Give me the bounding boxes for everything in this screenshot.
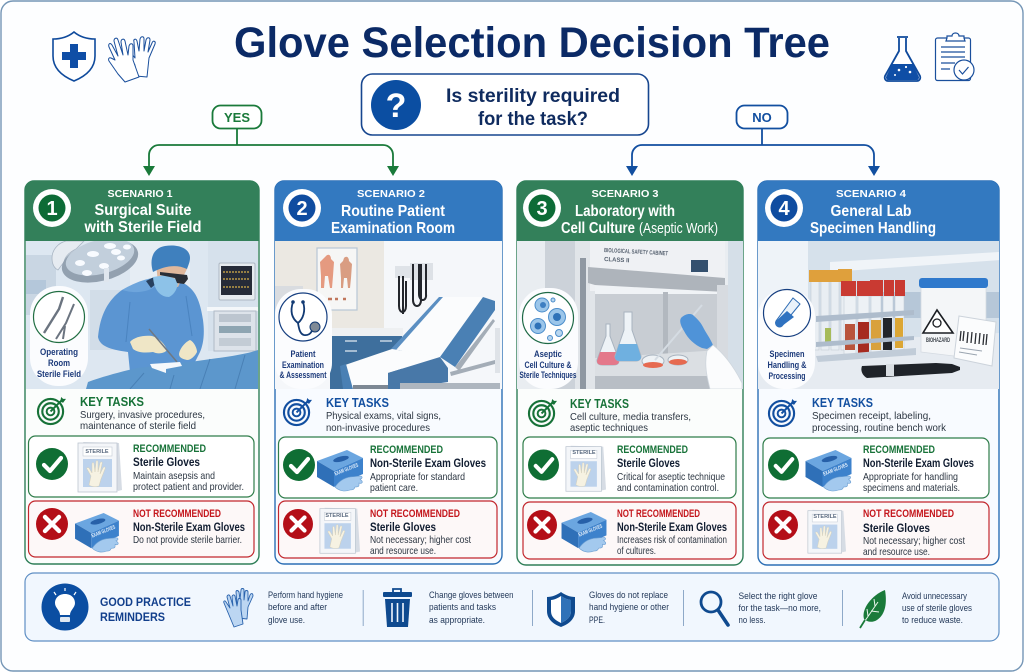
recommended: scenario 4 <box>763 438 989 498</box>
badge: patient examination: Examination <box>282 360 324 371</box>
header: scenario 4: Specimen Handling <box>810 220 936 237</box>
reminder: reduce waste: to reduce waste. <box>902 615 963 626</box>
not recommended: scenario 3: of cultures. <box>617 545 656 557</box>
recommended: scenario 3: Critical for aseptic technique <box>617 471 725 483</box>
not recommended: scenario 1: Do not provide sterile barrier. <box>133 534 242 546</box>
key tasks: scenario 3: Cell culture, media transfers, <box>570 411 691 423</box>
badge: operating room sterile field: Sterile Field <box>37 369 81 380</box>
reminder: not a replacement <box>589 590 669 626</box>
panel: scenario 4 <box>758 181 1000 565</box>
not recommended: scenario 2: STERILE <box>325 513 349 519</box>
not recommended: scenario 4: Sterile Gloves <box>863 521 930 535</box>
reminder: change gloves: Change gloves between <box>429 590 514 601</box>
badge: specimen handling: Specimen <box>770 349 805 360</box>
recommended: scenario 3: Sterile Gloves <box>617 456 680 470</box>
recommended: scenario 1: STERILE <box>85 449 109 455</box>
header: scenario 4: 4 <box>778 198 790 220</box>
recommended: scenario 4: RECOMMENDED <box>863 444 935 456</box>
not recommended: scenario 2: and resource use. <box>370 545 436 557</box>
recommended: scenario 3: RECOMMENDED <box>617 444 688 456</box>
badge: patient examination: Patient <box>290 349 316 360</box>
recommended: scenario 2: Non-Sterile Exam Gloves <box>370 456 486 470</box>
recommended: scenario 3: and contamination control. <box>617 482 719 494</box>
image: specimen tubes and biohazard container: BIOHAZARD <box>926 338 950 344</box>
reminders heading: REMINDERS <box>100 612 165 624</box>
recommended: scenario 4: EXAM GLOVES <box>822 462 849 478</box>
icon: gloves outline <box>109 37 155 82</box>
reminders heading: GOOD PRACTICE <box>100 597 191 609</box>
key tasks: scenario 2: non-invasive procedures <box>326 422 430 434</box>
recommended: scenario 3: STERILE <box>572 450 596 456</box>
key tasks: scenario 2 <box>284 396 441 434</box>
not recommended: scenario 4: NOT RECOMMENDED <box>863 508 954 520</box>
key tasks: scenario 2: KEY TASKS <box>326 396 389 410</box>
question text: for the task? <box>478 109 588 130</box>
reminder: hand hygiene <box>268 590 343 626</box>
not recommended: scenario 4: STERILE <box>813 514 837 520</box>
not recommended: scenario 2 <box>278 501 497 558</box>
recommended: scenario 2 <box>278 437 497 498</box>
badge: specimen handling: Processing <box>768 371 806 382</box>
header: scenario 1: Surgical Suite <box>94 202 192 219</box>
recommended: scenario 4: Appropriate for handling <box>863 471 958 483</box>
badge: patient examination <box>275 289 332 389</box>
not recommended: scenario 1: Non-Sterile Exam Gloves <box>133 520 245 534</box>
badge: specimen handling <box>758 290 815 389</box>
header: scenario 4: SCENARIO 4 <box>836 188 906 200</box>
header: scenario 3: (Aseptic Work) <box>639 220 718 237</box>
image: examination room <box>275 241 502 389</box>
panel: scenario 1 <box>25 181 259 564</box>
not recommended: scenario 1 <box>28 501 254 557</box>
recommended: scenario 2: patient care. <box>370 482 418 494</box>
not recommended: scenario 2: Not necessary; higher cost <box>370 534 471 546</box>
not recommended: scenario 2: Sterile Gloves <box>370 520 436 534</box>
not recommended: scenario 3: NOT RECOMMENDED <box>617 508 700 520</box>
recommended: scenario 1: RECOMMENDED <box>133 443 206 455</box>
panel: scenario 2 <box>275 181 502 564</box>
reminder: select right glove <box>738 591 821 626</box>
reminder: select right glove: Select the right glove <box>738 591 818 602</box>
icon: flask <box>885 37 920 81</box>
reminder: not a replacement: Gloves do not replace <box>589 590 668 601</box>
no branch: NO <box>752 110 772 125</box>
key tasks: scenario 3: KEY TASKS <box>570 397 629 411</box>
header: scenario 2: Routine Patient <box>341 203 446 220</box>
badge: patient examination: & Assessment <box>280 370 327 381</box>
reminders heading <box>100 597 191 624</box>
key tasks: scenario 3: aseptic techniques <box>570 422 648 434</box>
not recommended: scenario 1: NOT RECOMMENDED <box>133 508 221 520</box>
badge: aseptic cell culture: Sterile Techniques <box>520 370 576 381</box>
badge: operating room sterile field: Room <box>48 358 70 369</box>
key tasks: scenario 4: Specimen receipt, labeling, <box>812 410 931 422</box>
header: scenario 4 <box>758 181 999 241</box>
header: scenario 3 <box>517 181 743 241</box>
icon: medical shield <box>53 32 95 81</box>
badge: aseptic cell culture: Aseptic <box>534 349 562 360</box>
panel: good practice reminders <box>25 573 999 641</box>
key tasks: scenario 4: processing, routine bench work <box>812 422 947 434</box>
question box <box>362 74 648 135</box>
image: biological safety cabinet: BIOLOGICAL SAFETY CABINET <box>604 248 668 257</box>
not recommended: scenario 3 <box>523 502 736 559</box>
question text: Is sterility required <box>446 86 620 107</box>
badge: aseptic cell culture: Cell Culture & <box>524 360 572 371</box>
recommended: scenario 4: specimens and materials. <box>863 482 960 494</box>
header: scenario 4: General Lab <box>830 203 912 220</box>
header: scenario 1: SCENARIO 1 <box>108 188 173 200</box>
header: scenario 2: SCENARIO 2 <box>357 188 425 200</box>
header: scenario 3: SCENARIO 3 <box>592 188 659 200</box>
recommended: scenario 4: Non-Sterile Exam Gloves <box>863 456 974 470</box>
icon: clipboard with check <box>936 33 974 80</box>
badge: operating room sterile field <box>30 286 88 386</box>
title: Glove Selection Decision Tree <box>234 19 830 67</box>
recommended: scenario 2: RECOMMENDED <box>370 444 443 456</box>
header: scenario 3: Cell Culture <box>561 220 635 237</box>
image: specimen tubes and biohazard container <box>758 241 1000 389</box>
yes branch: YES <box>224 110 250 125</box>
icon: light bulb <box>42 584 88 630</box>
question text <box>446 86 620 130</box>
yes branch <box>143 106 399 176</box>
icon: gloves <box>224 588 253 627</box>
header: scenario 2: 2 <box>296 198 308 220</box>
header: scenario 3: 3 <box>536 198 548 220</box>
image: biological safety cabinet <box>517 241 743 389</box>
reminder: change gloves: patients and tasks <box>429 602 496 613</box>
key tasks: scenario 4 <box>769 396 947 434</box>
reminder: reduce waste: use of sterile gloves <box>902 603 972 614</box>
not recommended: scenario 4: Not necessary; higher cost <box>863 535 965 547</box>
reminder: hand hygiene: glove use. <box>268 615 305 626</box>
key tasks: scenario 1: Surgery, invasive procedures, <box>80 409 205 421</box>
icon: shield <box>547 592 575 627</box>
badge: specimen handling: Handling & <box>768 360 807 371</box>
header: scenario 1 <box>25 181 259 241</box>
not recommended: scenario 4: and resource use. <box>863 546 930 558</box>
not recommended: scenario 3: Non-Sterile Exam Gloves <box>617 520 727 534</box>
reminder: reduce waste: Avoid unnecessary <box>902 591 967 602</box>
recommended: scenario 2: Appropriate for standard <box>370 471 465 483</box>
not recommended: scenario 2: NOT RECOMMENDED <box>370 508 460 520</box>
header: scenario 1: 1 <box>46 198 58 220</box>
reminder: hand hygiene: before and after <box>268 602 327 613</box>
not recommended: scenario 1: EXAM GLOVES <box>91 525 117 540</box>
reminder: not a replacement: hand hygiene or other <box>589 602 669 613</box>
reminder: change gloves <box>429 590 514 626</box>
key tasks: scenario 1 <box>38 395 205 432</box>
header: scenario 2: Examination Room <box>331 220 455 237</box>
reminder: select right glove: for the task—no more, <box>738 603 821 614</box>
key tasks: scenario 3 <box>529 397 691 434</box>
key tasks: scenario 2: Physical exams, vital signs, <box>326 410 441 422</box>
header: scenario 3: Laboratory with <box>575 203 675 220</box>
reminder: select right glove: no less. <box>738 615 766 626</box>
icon: magnifier <box>701 592 728 625</box>
no branch <box>626 106 880 176</box>
panel: scenario 3 <box>517 181 743 565</box>
reminder: change gloves: as appropriate. <box>429 615 485 626</box>
key tasks: scenario 1: maintenance of sterile field <box>80 420 196 432</box>
recommended: scenario 1: Maintain asepsis and <box>133 470 215 482</box>
badge: aseptic cell culture <box>519 288 578 389</box>
reminder: reduce waste <box>902 591 972 626</box>
key tasks: scenario 1: KEY TASKS <box>80 395 144 409</box>
icon: question mark: ? <box>386 87 406 125</box>
not recommended: scenario 4 <box>763 502 989 559</box>
reminder: not a replacement: PPE. <box>589 615 605 626</box>
header: scenario 2 <box>275 181 502 241</box>
recommended: scenario 2: EXAM GLOVES <box>334 463 360 478</box>
recommended: scenario 1: protect patient and provider. <box>133 481 244 493</box>
image: biological safety cabinet: CLASS II <box>604 257 630 264</box>
recommended: scenario 1: Sterile Gloves <box>133 455 200 469</box>
icon: question mark <box>371 80 421 130</box>
recommended: scenario 1 <box>28 436 254 497</box>
header: scenario 1: with Sterile Field <box>84 219 202 236</box>
reminder: hand hygiene: Perform hand hygiene <box>268 590 343 601</box>
badge: operating room sterile field: Operating <box>40 347 78 358</box>
key tasks: scenario 4: KEY TASKS <box>812 396 873 410</box>
not recommended: scenario 3: Increases risk of contamination <box>617 534 727 546</box>
icon: leaf <box>860 590 886 628</box>
recommended: scenario 3 <box>523 437 736 498</box>
not recommended: scenario 3: EXAM GLOVES <box>578 524 604 539</box>
icon: trash bin <box>383 589 412 627</box>
image: surgeon in operating room <box>26 232 259 389</box>
